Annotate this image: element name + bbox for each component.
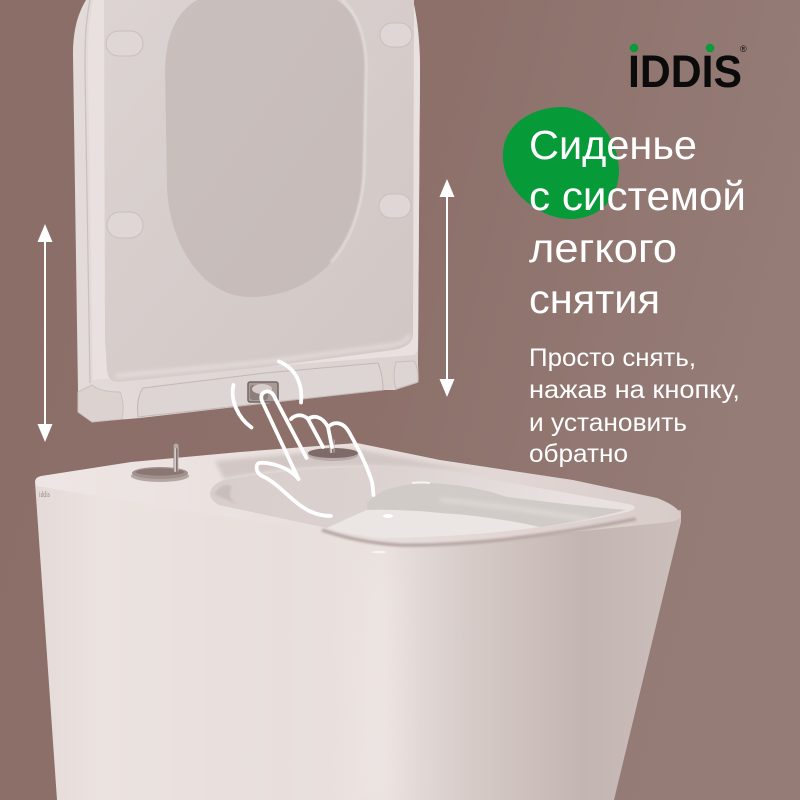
bumper top right (380, 23, 412, 47)
left hinge cap (78, 385, 123, 422)
back deck shading (215, 449, 490, 479)
inner bowl shelf (367, 483, 626, 527)
bowl left lobe shadow (214, 485, 238, 505)
left hinge post (131, 444, 189, 482)
bumper lower left (107, 212, 143, 238)
description text (529, 344, 740, 468)
index finger (261, 391, 306, 479)
lid opening (165, 0, 366, 297)
description text: Просто снять, (529, 344, 696, 372)
bumper lower right (379, 194, 411, 218)
logo wordmark: IDDIS (628, 46, 742, 97)
toilet body (35, 482, 681, 800)
heading: Сиденье (529, 122, 697, 168)
description text: обратно (529, 440, 628, 468)
water area (327, 510, 540, 538)
opening rim highlight (331, 0, 366, 262)
heading: легкого (529, 225, 677, 271)
description text: нажав на кнопку, (529, 376, 740, 404)
seat rim groove (85, 0, 90, 383)
seat rim main band (88, 0, 420, 380)
right hinge post (308, 439, 358, 461)
logo dot right (706, 44, 714, 52)
bowl opening (210, 467, 635, 538)
corner glint (372, 551, 386, 553)
seat recess (104, 0, 414, 382)
rim front shadow (322, 519, 636, 545)
inner shelf highlight (412, 482, 430, 484)
toilet seat (73, 0, 420, 422)
press arc right (279, 362, 301, 402)
thumb and palm (257, 463, 331, 516)
logo dot left (630, 44, 638, 52)
toilet bowl (35, 443, 681, 800)
registered mark: ® (740, 44, 747, 54)
heading: с системой (529, 173, 746, 219)
bumper top left (106, 31, 143, 56)
description text: и установить (529, 409, 687, 437)
soft vertical highlight on front corner (350, 570, 400, 800)
right hinge cap (394, 361, 418, 389)
up-down arrow right (440, 179, 454, 397)
seat outer shape (73, 0, 420, 422)
middle finger (291, 415, 323, 447)
release button (248, 382, 278, 402)
recess edge highlight (116, 335, 410, 376)
pinky and back of hand (328, 423, 374, 495)
icon: pressing hand (233, 362, 374, 516)
green accent blob (503, 107, 619, 219)
logo mark on toilet: iddis (39, 490, 50, 499)
heading: снятия (529, 276, 660, 322)
heading (529, 122, 746, 322)
press arc left (233, 385, 252, 428)
panel: brand logo (628, 44, 747, 97)
hinge bar (138, 363, 383, 417)
ring finger (308, 417, 332, 447)
up-down arrow left (38, 224, 52, 442)
shelf groove (440, 500, 590, 520)
water glint (383, 514, 393, 518)
toilet rim deck (35, 443, 681, 548)
